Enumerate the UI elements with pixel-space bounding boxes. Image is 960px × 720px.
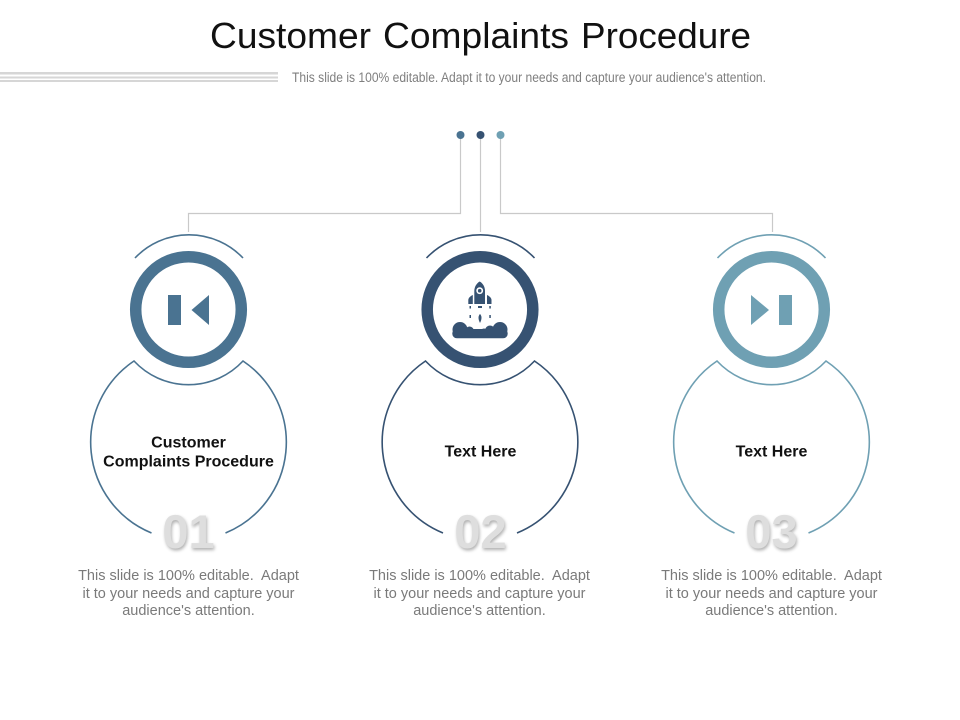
heading 2: Text Here xyxy=(445,444,516,460)
description 3: This slide is 100% editable. Adapt xyxy=(661,568,882,584)
outline circle 3 xyxy=(674,361,869,533)
description 1 xyxy=(78,568,299,619)
outline circle 2 xyxy=(382,361,578,533)
subtitle: This slide is 100% editable. Adapt it to your needs and capture your audience's attention. xyxy=(292,70,766,85)
description 1: it to your needs and capture your xyxy=(82,586,295,602)
description 1: This slide is 100% editable. Adapt xyxy=(78,568,299,584)
description 2: This slide is 100% editable. Adapt xyxy=(369,568,590,584)
panel: step 2 xyxy=(369,235,590,619)
ring 3 xyxy=(719,257,824,362)
title: Procedure xyxy=(581,15,751,56)
description 2: audience's attention. xyxy=(413,603,546,619)
top arc 3 xyxy=(718,235,826,258)
icon: skip back xyxy=(168,295,209,325)
description 1: audience's attention. xyxy=(122,603,255,619)
top arc 1 xyxy=(135,235,243,258)
description 3 xyxy=(661,568,882,619)
header rule lines xyxy=(0,72,278,82)
heading 1: Complaints Procedure xyxy=(103,454,274,470)
connector lines xyxy=(188,135,772,232)
title: Complaints xyxy=(383,15,569,56)
panel: step 1 xyxy=(78,235,299,619)
heading 3: Text Here xyxy=(736,444,807,460)
number 03: 03 xyxy=(745,505,798,558)
ring 2 xyxy=(427,257,533,362)
title xyxy=(210,15,751,56)
top arc 2 xyxy=(426,235,534,258)
number 01: 01 xyxy=(162,505,215,558)
description 2 xyxy=(369,568,590,619)
panel: step 3 xyxy=(661,235,882,619)
description 2: it to your needs and capture your xyxy=(374,586,586,602)
connector dots xyxy=(456,131,504,139)
title: Customer xyxy=(210,15,371,56)
heading 1: Customer xyxy=(151,434,226,452)
number 02: 02 xyxy=(454,505,507,558)
outline circle 1 xyxy=(91,361,286,533)
heading 1 xyxy=(103,434,274,470)
icon: rocket xyxy=(452,282,508,338)
ring 1 xyxy=(136,257,241,362)
description 3: audience's attention. xyxy=(705,603,838,619)
description 3: it to your needs and capture your xyxy=(666,586,878,602)
icon: skip forward xyxy=(751,295,792,325)
